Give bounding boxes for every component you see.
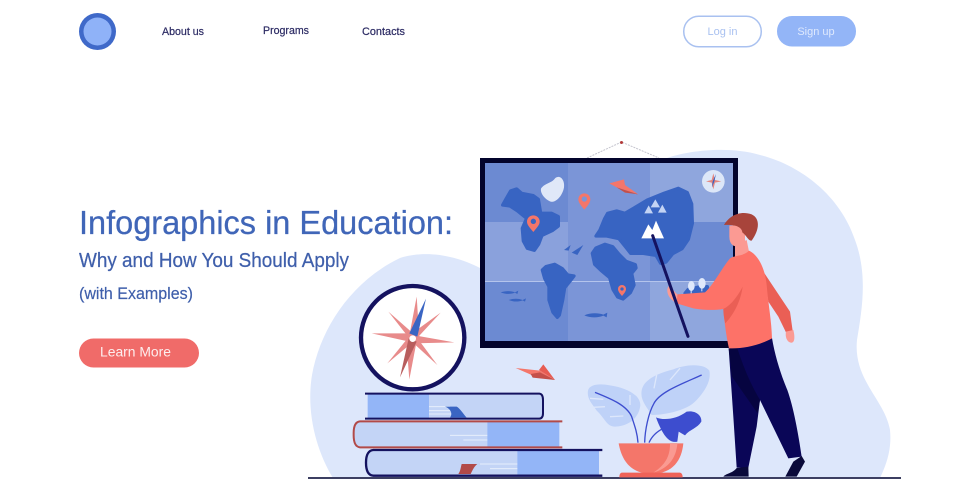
map frame [480,158,738,348]
legs [723,338,805,477]
leaves [588,365,710,427]
leaf notches [590,368,680,417]
button: Learn More: Learn More [100,344,171,360]
sleeve shadow [723,287,743,323]
map paper plane [609,179,638,194]
nav link: About us: About us [162,26,204,38]
button: Sign up: Sign up [797,26,835,38]
continents [503,188,709,317]
nav link: Contacts: Contacts [362,26,405,38]
map fish [501,291,607,317]
map mountains [641,221,664,238]
back hand [786,330,794,343]
compass rose [372,297,454,379]
hanger wire [587,141,659,158]
title: Infographics in Education: [79,205,453,242]
compass [361,286,464,389]
pot [619,443,683,474]
subtitle note: (with Examples) [79,284,193,303]
button: Learn More [79,338,199,368]
person with pointer [653,213,805,477]
map mini compass [702,170,725,193]
navigation bar [79,13,856,50]
pointer [653,236,688,336]
back arm [763,272,793,332]
hand [667,286,677,303]
map birds [564,245,583,255]
stems [595,375,702,443]
compass needle [409,299,426,337]
hair [724,213,758,241]
bottom book [366,450,602,476]
dark leaf [656,411,701,442]
ice cap [541,177,564,202]
background blob [310,150,890,478]
neck [735,240,749,257]
top book [365,393,543,419]
world map [480,158,738,348]
button: Log in [684,16,761,47]
subtitle: Why and How You Should Apply [79,249,350,272]
middle book [354,421,562,447]
potted plant [588,365,710,477]
face [729,224,745,246]
stack of books [354,393,602,476]
map panels [485,163,733,341]
button: Sign up [777,16,856,46]
logo [79,13,116,50]
paper plane [516,364,555,380]
heading block [79,205,453,303]
small trees [688,278,706,293]
nav link: Programs: Programs [263,25,309,37]
map trees [644,199,667,213]
torso [677,251,772,348]
ground line [308,477,901,479]
map pins [527,193,626,296]
button: Log in: Log in [708,26,737,38]
shoes [723,456,805,477]
